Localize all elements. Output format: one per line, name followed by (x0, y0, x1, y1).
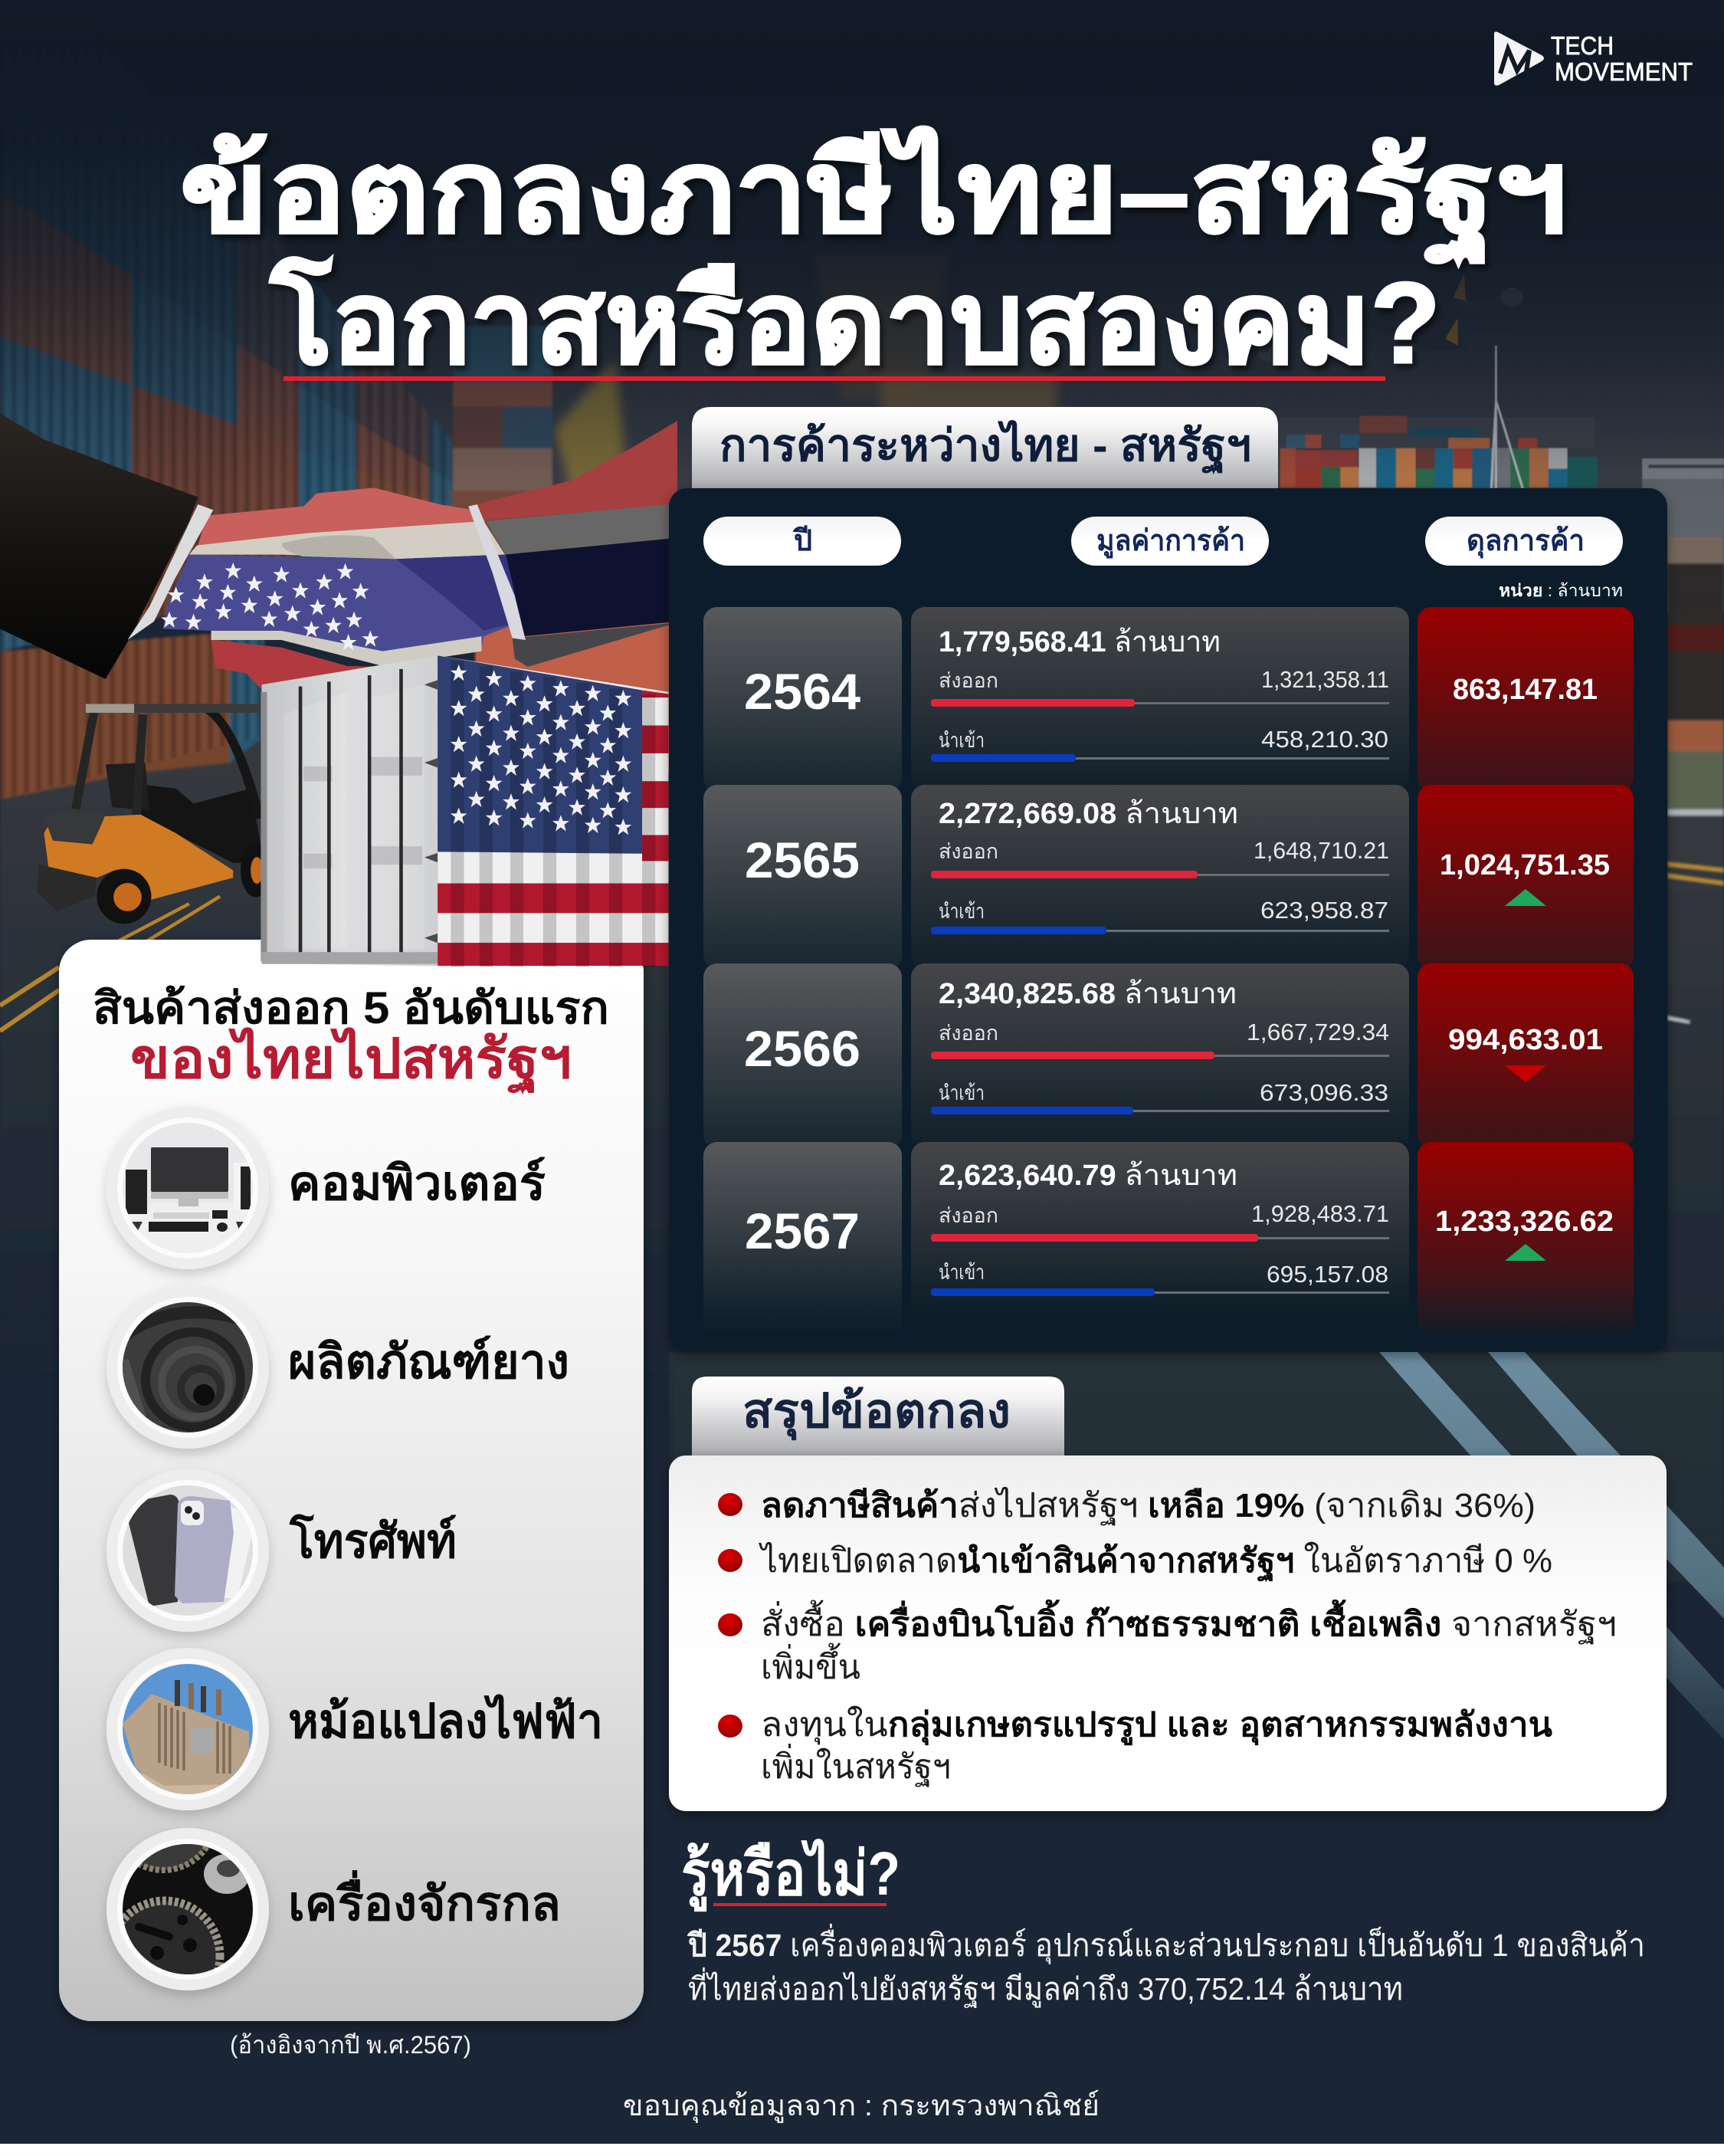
clasped hands in flag colours (127, 487, 526, 692)
label: phones: โทรศัพท์ (289, 1513, 457, 1568)
row: 2566: 994,633.01 (1448, 1024, 1603, 1056)
bullet: open market: ไทยเปิดตลาดนำเข้าสินค้าจากสหรัฐฯ ในอัตราภาษี 0 % (759, 1541, 1552, 1582)
row: 2564: ส่งออก (939, 669, 998, 692)
title line 2: โอกาสหรือดาบสองคม? (269, 256, 1440, 387)
shipping container with US flag (262, 655, 668, 967)
tab heading: การค้าระหว่างไทย - สหรัฐฯ (719, 420, 1251, 474)
right sleeve in Thai flag colours (468, 421, 677, 667)
bullet: purchases (718, 1599, 1617, 1686)
logo wordmark: MOVEMENT (1555, 57, 1693, 86)
panel: trade table (669, 488, 1667, 1352)
column header: year (703, 517, 901, 566)
row: 2564: 863,147.81 (1453, 674, 1598, 706)
row: 2567: 2,623,640.79 ล้านบาท (939, 1160, 1237, 1192)
label: computers: คอมพิวเตอร์ (288, 1157, 546, 1210)
row: 2565: 1,648,710.21 (1254, 837, 1389, 864)
row: 2564: 458,210.30 (1261, 726, 1388, 753)
row: 2564: 2564 (744, 663, 860, 720)
source credit: ขอบคุณข้อมูลจาก : กระทรวงพาณิชย์ (623, 2089, 1100, 2123)
bullet: tariff cut: ลดภาษีสินค้าส่งไปสหรัฐฯ เหลือ 19% (จากเดิม 36%) (761, 1486, 1536, 1525)
row: 2567: 695,157.08 (1267, 1261, 1388, 1288)
item: transformers (107, 1648, 603, 1810)
icon: aircraft (1257, 274, 1630, 363)
row: 2567: นำเข้า (939, 1261, 985, 1284)
column header: trade balance (1425, 517, 1623, 566)
heading: top 5 exports: สินค้าส่งออก 5 อันดับแรก (93, 983, 609, 1033)
forklift (38, 704, 271, 941)
row: 2566: 673,096.33 (1260, 1079, 1388, 1106)
item: machinery (107, 1766, 561, 2011)
bullet: purchases: เพิ่มขึ้น (761, 1642, 860, 1686)
did you know (681, 1838, 1645, 2008)
container doors (262, 655, 440, 966)
row: 2567: ส่งออก (939, 1204, 998, 1227)
row: 2566: นำเข้า (939, 1081, 985, 1104)
column header: trade balance: ดุลการค้า (1467, 525, 1585, 559)
heading: did you know: รู้หรือไม่? (681, 1838, 900, 1912)
row: 2566: 2,340,825.68 ล้านบาท (939, 978, 1237, 1010)
row: 2566: 1,667,729.34 (1247, 1019, 1389, 1045)
column header: trade value (1071, 517, 1269, 566)
row: 2566 (703, 963, 1634, 1148)
heading: from Thailand to the US: ของไทยไปสหรัฐฯ (130, 1026, 572, 1094)
row: 2564 (703, 607, 1634, 791)
row: 2567: 1,928,483.71 (1251, 1200, 1389, 1227)
row: 2565: 1,024,751.35 (1440, 849, 1610, 881)
US flag side (438, 655, 668, 967)
road markings (1379, 1352, 1724, 1740)
body text: ปี 2567 เครื่องคอมพิวเตอร์ อุปกรณ์และส่วนประกอบ เป็นอันดับ 1 ของสินค้า (688, 1928, 1690, 1963)
row: 2565 (703, 785, 1634, 970)
title (180, 126, 1567, 387)
row: 2564: 1,779,568.41 ล้านบาท (939, 626, 1221, 658)
top fade (0, 0, 1724, 613)
item: rubber products (107, 1286, 569, 1449)
tab: summary (692, 1377, 1064, 1456)
row: 2564: นำเข้า (939, 729, 985, 752)
logo wordmark: TECH (1551, 31, 1614, 60)
row: 2565: 623,958.87 (1260, 897, 1388, 924)
bullet: investment: ลงทุนในกลุ่มเกษตรแปรรูป และ อุตสาหกรรมพลังงาน (761, 1705, 1552, 1746)
column header: year: ปี (792, 525, 812, 557)
row: 2566: 2566 (744, 1020, 860, 1077)
item: phones (107, 1469, 457, 1632)
cargo ship containers (1280, 346, 1724, 537)
title underline (284, 376, 1385, 381)
handshake illustration (0, 413, 677, 692)
row: 2567: 1,233,326.62 (1435, 1206, 1614, 1238)
title line 1: ข้อตกลงภาษีไทย–สหรัฐฯ (180, 126, 1567, 267)
row: 2565: 2,272,669.08 ล้านบาท (939, 798, 1238, 830)
bullet: investment (718, 1705, 1552, 1787)
panel: deal summary (669, 1455, 1667, 1811)
icon: logo mark (1494, 31, 1544, 86)
row: 2567 (703, 1142, 1634, 1337)
footnote: reference year: (อ้างอิงจากปี พ.ศ.2567) (230, 2031, 471, 2059)
row: 2565: ส่งออก (939, 840, 998, 863)
panel: top 5 exports (59, 940, 644, 2021)
unit note: หน่วย : ล้านบาท (1499, 581, 1623, 600)
bullet: purchases: สั่งซื้อ เครื่องบินโบอิ้ง ก๊าซธรรมชาติ เชื้อเพลิง จากสหรัฐฯ (761, 1599, 1617, 1644)
body text: ที่ไทยส่งออกไปยังสหรัฐฯ มีมูลค่าถึง 370,752.14 ล้านบาท (688, 1967, 1403, 2008)
label: machinery: เครื่องจักรกล (288, 1870, 561, 1931)
icon: up arrow (1505, 889, 1546, 906)
row: 2566: ส่งออก (939, 1022, 998, 1045)
logo wordmark (1551, 31, 1693, 86)
row: 2565: นำเข้า (939, 900, 985, 923)
label: rubber products: ผลิตภัณฑ์ยาง (288, 1335, 569, 1389)
tab: trade between Thailand and US (692, 407, 1278, 491)
icon: up arrow (1505, 1244, 1546, 1261)
row: 2565: 2565 (745, 832, 860, 888)
column header: trade value: มูลค่าการค้า (1096, 525, 1245, 559)
item: computers (107, 1107, 546, 1269)
tab heading: summary: สรุปข้อตกลง (742, 1385, 1011, 1440)
row: 2567: 2567 (745, 1203, 860, 1259)
label: transformers: หม้อแปลงไฟฟ้า (288, 1694, 603, 1748)
bullet: investment: เพิ่มในสหรัฐฯ (761, 1743, 951, 1787)
row: 2564: 1,321,358.11 (1261, 666, 1389, 693)
left black sleeve (0, 413, 198, 679)
logo: Tech Movement (1494, 31, 1693, 86)
icon: down arrow (1505, 1065, 1546, 1082)
